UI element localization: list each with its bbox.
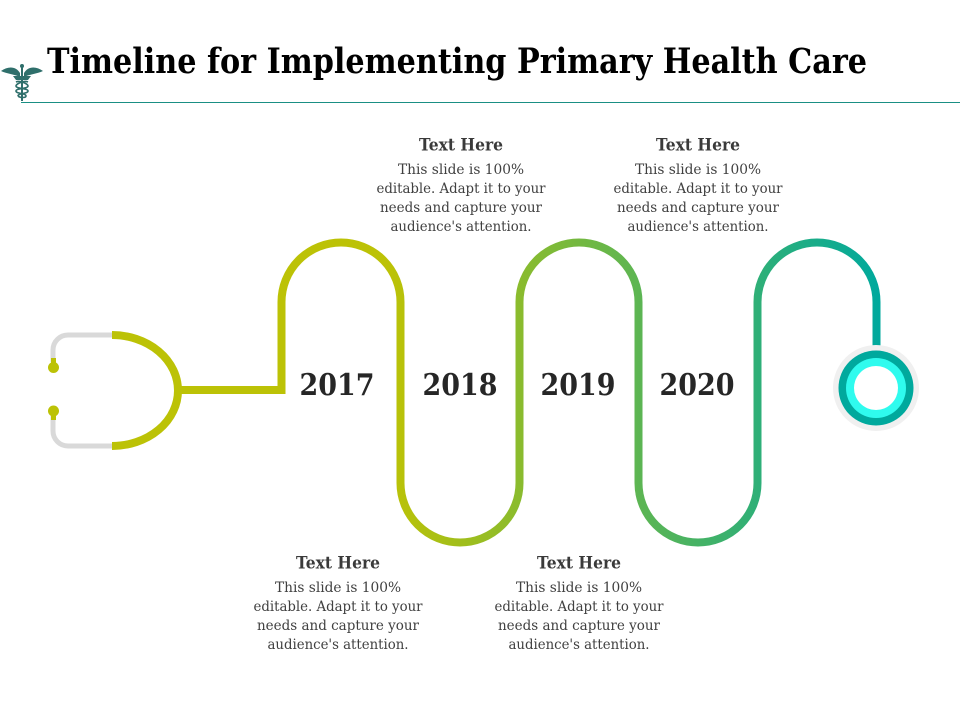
text block 2020: This slide is 100% xyxy=(635,162,761,178)
text block 2018: audience's attention. xyxy=(390,219,532,235)
year 2020: 2020 xyxy=(660,368,734,403)
text block 2018: This slide is 100% xyxy=(398,162,524,178)
year 2017: 2017 xyxy=(300,368,374,403)
header rule xyxy=(21,102,960,103)
stethoscope yoke xyxy=(112,335,178,446)
year 2019: 2019 xyxy=(540,368,616,403)
chest piece xyxy=(833,345,919,431)
text block 2019: needs and capture your xyxy=(498,618,660,634)
text block 2019: This slide is 100% xyxy=(516,580,642,596)
text block 2019: editable. Adapt it to your xyxy=(494,599,664,615)
text block 2018: Text Here xyxy=(419,136,503,156)
text block 2019: audience's attention. xyxy=(508,637,650,653)
icon: caduceus xyxy=(1,64,43,101)
text block 2018: editable. Adapt it to your xyxy=(376,181,546,197)
text block 2017: Text Here xyxy=(296,554,380,574)
text block 2020 xyxy=(614,136,783,235)
text block 2018: needs and capture your xyxy=(380,200,542,216)
text block 2017: audience's attention. xyxy=(268,637,408,653)
text block 2017: This slide is 100% xyxy=(275,580,401,596)
text block 2020: needs and capture your xyxy=(617,200,779,216)
text block 2019 xyxy=(494,554,664,653)
text block 2017: editable. Adapt it to your xyxy=(254,599,423,615)
text block 2020: audience's attention. xyxy=(628,219,768,235)
text block 2020: Text Here xyxy=(656,136,740,156)
text block 2017 xyxy=(254,554,423,653)
text block 2017: needs and capture your xyxy=(257,618,419,634)
year 2018: 2018 xyxy=(422,368,498,403)
icon: stethoscope earpieces xyxy=(48,335,112,446)
text block 2020: editable. Adapt it to your xyxy=(614,181,783,197)
text block 2019: Text Here xyxy=(537,554,621,574)
timeline tube xyxy=(178,243,876,542)
text block 2018 xyxy=(376,136,546,235)
